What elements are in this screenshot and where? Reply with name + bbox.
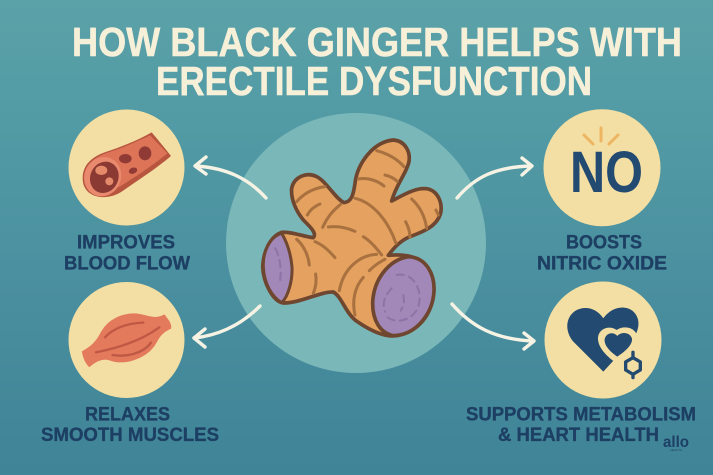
icon: sparkle rays — [584, 128, 618, 144]
panel: supports metabolism and heart health — [466, 282, 696, 446]
panel: boosts nitric oxide — [537, 109, 667, 274]
ginger cut end: right — [373, 257, 434, 336]
arrow: to smooth muscles — [194, 306, 260, 347]
icon: NO molecule: NO — [570, 140, 643, 205]
icon: smooth muscle — [82, 314, 171, 367]
arrow: to nitric oxide — [457, 158, 532, 198]
label: improves blood flow: IMPROVES — [77, 232, 175, 254]
label: supports metabolism and heart health: SUPPORTS METABOLISM — [466, 404, 696, 426]
ginger skin rings — [297, 151, 438, 315]
central circle — [226, 113, 486, 373]
label: boosts nitric oxide — [537, 232, 667, 274]
label: relaxes smooth muscles — [41, 404, 219, 446]
ginger cut end: left — [263, 233, 292, 303]
icon: black ginger root — [263, 140, 441, 336]
label: boosts nitric oxide: NITRIC OXIDE — [537, 252, 667, 274]
label: improves blood flow — [64, 232, 191, 274]
label: improves blood flow: BLOOD FLOW — [64, 252, 191, 274]
title — [72, 19, 682, 104]
molecule — [626, 352, 640, 378]
arrow: to blood flow — [195, 157, 266, 198]
label: relaxes smooth muscles: SMOOTH MUSCLES — [41, 424, 219, 446]
ginger cut markings — [275, 248, 420, 321]
label: supports metabolism and heart health: & HEART HEALTH — [498, 424, 659, 446]
title: ERECTILE DYSFUNCTION — [156, 58, 592, 104]
icon: heart with molecule — [567, 307, 640, 378]
icon: blood vessel — [78, 132, 171, 203]
label: boosts nitric oxide: BOOSTS — [566, 232, 642, 254]
arrow: to metabolism and heart — [452, 304, 534, 349]
logo: allo health: allo — [663, 434, 689, 451]
panel: relaxes smooth muscles — [41, 282, 219, 446]
label: relaxes smooth muscles: RELAXES — [85, 404, 170, 426]
label: supports metabolism and heart health — [466, 404, 696, 446]
logo: allo health: HEALTH — [670, 448, 682, 452]
panel: improves blood flow — [64, 110, 191, 274]
